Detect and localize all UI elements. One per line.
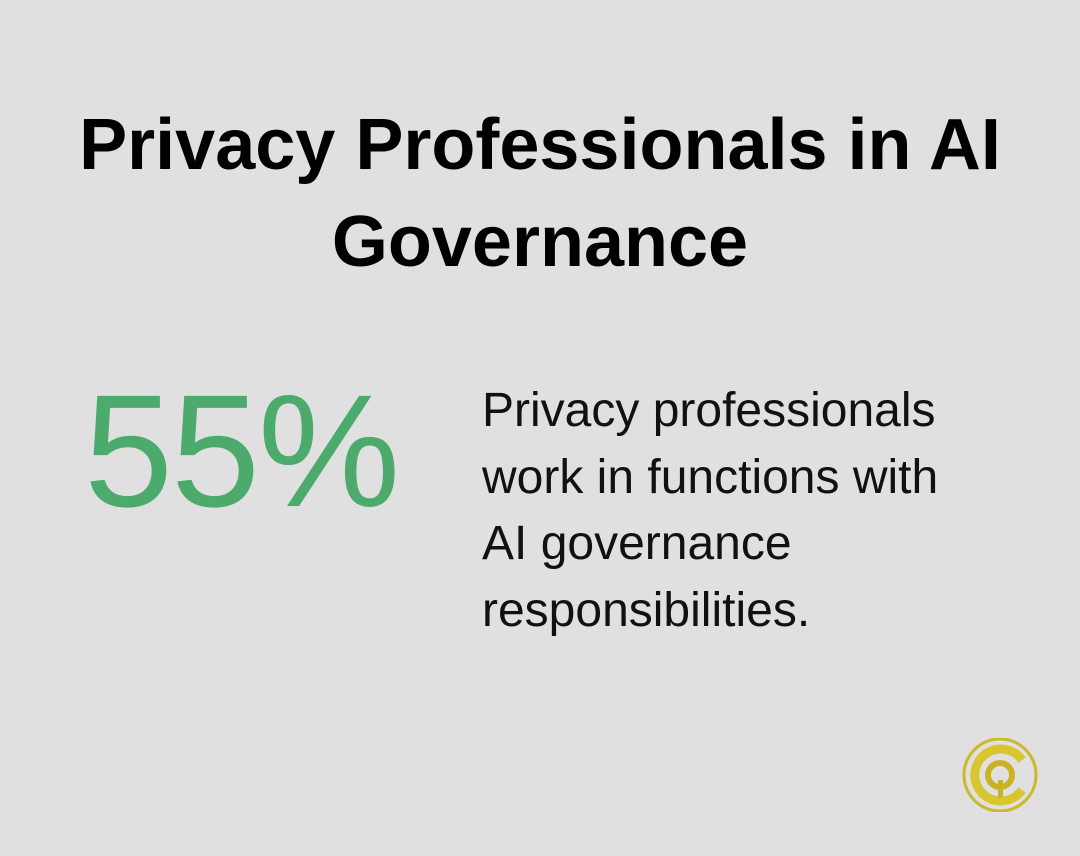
description text: work in functions with	[482, 450, 938, 504]
stat: 55%: 55%	[84, 361, 398, 540]
icon: logo	[962, 738, 1038, 812]
description text: responsibilities.	[482, 584, 810, 636]
title: Privacy Professionals in AI	[79, 105, 1001, 185]
title: Governance	[332, 202, 748, 282]
description text: AI governance	[482, 517, 792, 570]
description text: Privacy professionals	[482, 384, 936, 437]
description text	[482, 384, 938, 636]
title	[79, 105, 1001, 282]
